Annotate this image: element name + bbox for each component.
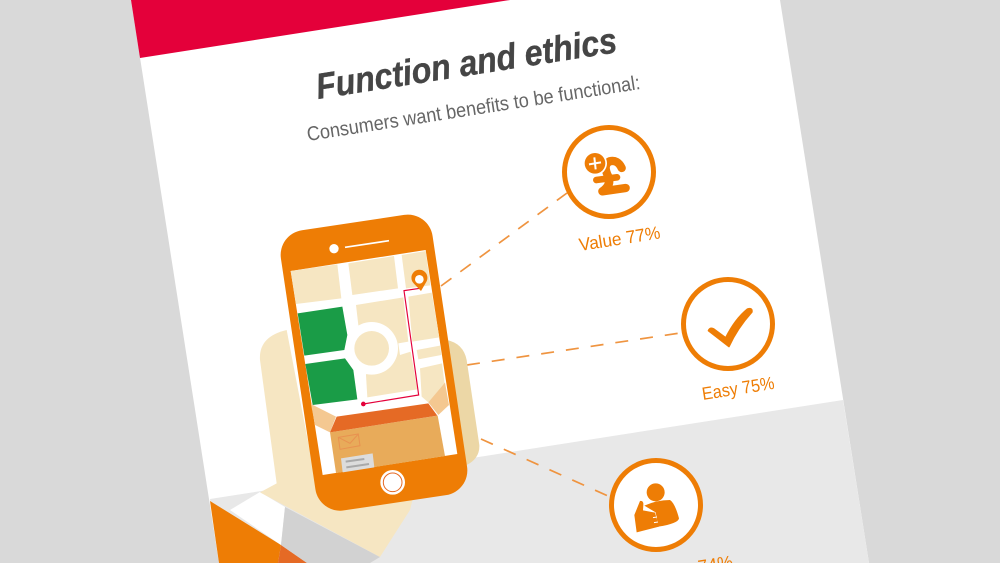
easy label: Easy 75% — [701, 373, 776, 404]
green park lower — [305, 358, 357, 405]
third circle — [612, 460, 700, 550]
left hand palm and wrist — [260, 330, 417, 557]
red header band — [131, 0, 510, 58]
icon: pound with plus — [583, 151, 626, 191]
roundabout — [345, 322, 398, 375]
value label: Value 77% — [578, 223, 662, 255]
green park upper — [298, 307, 347, 356]
white cuff — [230, 492, 285, 545]
shipping label — [341, 453, 374, 472]
envelope icon — [338, 434, 360, 449]
benefit: easy — [684, 280, 776, 404]
benefit: third — [612, 460, 734, 563]
value circle — [564, 128, 654, 216]
grey sleeve — [281, 507, 380, 563]
icon: person with thumbs up — [634, 483, 679, 532]
parcel — [311, 383, 449, 473]
left flap — [311, 404, 336, 432]
title: Function and ethics — [313, 19, 620, 107]
orange jacket — [210, 501, 281, 563]
right hand fingers — [417, 340, 479, 467]
dashed connector: value — [441, 193, 567, 286]
parcel body — [330, 416, 445, 473]
parcel lid — [330, 403, 437, 432]
map tiles — [291, 251, 445, 402]
home button — [380, 470, 405, 495]
phone illustration (drawn in 3x crop coordinates) — [260, 211, 479, 557]
phone screen — [291, 250, 457, 475]
darker jacket fold — [278, 545, 307, 563]
right flap — [428, 383, 449, 415]
dashed connector: third benefit — [481, 439, 608, 496]
icon: check mark — [708, 309, 752, 347]
phone speaker — [329, 241, 389, 253]
sleeve and arm — [210, 492, 380, 563]
grey lower panel — [210, 400, 869, 563]
benefit: value — [564, 128, 662, 255]
phone body — [277, 211, 471, 514]
route line — [361, 288, 420, 406]
easy circle — [684, 280, 772, 368]
dashed connector: easy — [467, 333, 680, 365]
subtitle: Consumers want benefits to be functional: — [305, 72, 642, 146]
paper sheet — [131, 0, 869, 563]
map pin — [411, 270, 427, 291]
